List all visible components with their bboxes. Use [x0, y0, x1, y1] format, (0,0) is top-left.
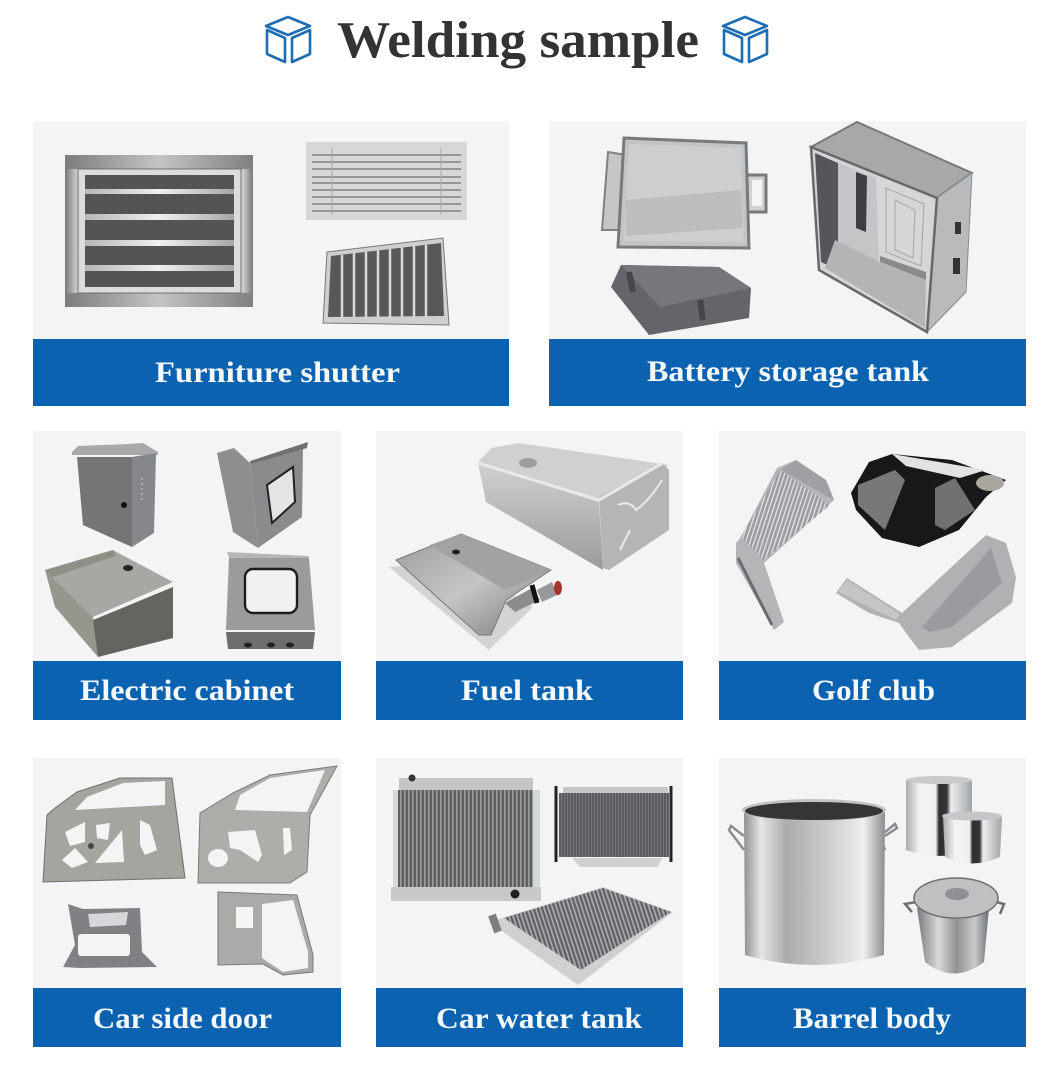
title: Welding sample — [337, 12, 699, 69]
panel: barrel body — [719, 758, 1026, 1047]
caption: Car water tank — [436, 1002, 642, 1035]
caption: Golf club — [812, 674, 935, 707]
image: large tank — [478, 443, 669, 570]
image: dark cover — [611, 265, 751, 335]
caption: Battery storage tank — [647, 355, 929, 388]
image: cabinet upper right — [217, 442, 308, 548]
image: radiator large — [391, 774, 541, 901]
panel: golf club — [719, 431, 1026, 720]
panel: furniture shutter — [33, 121, 509, 406]
image: cabinet lower left — [45, 550, 173, 657]
panel: car side door — [33, 758, 341, 1047]
image: door rear — [198, 766, 337, 883]
panel: electric cabinet — [33, 431, 341, 720]
image: iron head — [736, 460, 834, 630]
image: dark cover — [851, 454, 1006, 547]
caption bar — [719, 661, 1026, 720]
image: radiator tilted — [489, 887, 673, 985]
image: large shutter — [65, 155, 253, 307]
panel: car water tank — [376, 758, 683, 1047]
caption bar — [33, 339, 509, 406]
image: battery housing — [811, 122, 972, 332]
image: small pot — [942, 812, 1002, 864]
image: lidded pot — [905, 878, 1004, 974]
image: door frame — [218, 892, 313, 975]
caption bar — [376, 988, 683, 1047]
image: club head — [836, 535, 1016, 650]
image: trim — [63, 904, 157, 968]
caption: Barrel body — [793, 1002, 951, 1035]
image: tall pot — [906, 776, 972, 856]
caption: Electric cabinet — [80, 674, 294, 707]
caption bar — [549, 339, 1026, 406]
image: cabinet lower right — [226, 552, 315, 649]
image: cabinet upper left — [72, 443, 158, 547]
image: tray — [602, 138, 766, 248]
caption bar — [33, 661, 341, 720]
caption: Fuel tank — [461, 674, 593, 707]
caption: Car side door — [93, 1002, 272, 1035]
image: radiator small — [556, 786, 671, 867]
panel: fuel tank — [376, 431, 683, 720]
image: white grille — [306, 142, 467, 220]
caption bar — [33, 988, 341, 1047]
caption: Furniture shutter — [155, 356, 400, 389]
header — [266, 12, 767, 69]
icon: box right — [723, 17, 767, 62]
image: door front — [43, 778, 185, 882]
icon: box left — [266, 17, 310, 62]
image: large barrel — [729, 799, 897, 965]
panel: battery storage tank — [549, 121, 1026, 406]
image: angled shutter — [323, 238, 449, 325]
caption bar — [376, 661, 683, 720]
caption bar — [719, 988, 1026, 1047]
image: small tank — [389, 534, 562, 650]
